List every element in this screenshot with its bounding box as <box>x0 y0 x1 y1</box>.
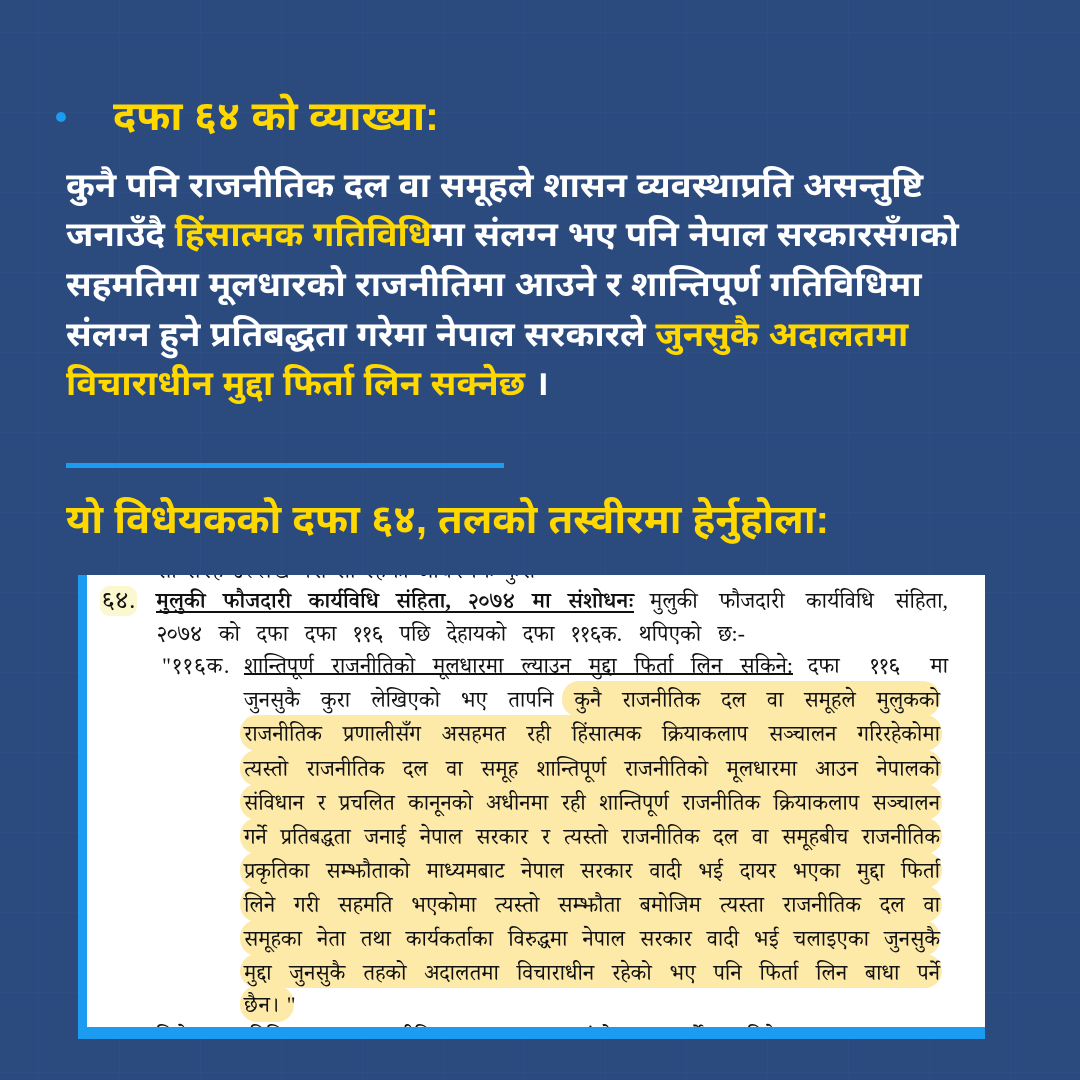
section heading <box>154 588 948 614</box>
divider line <box>66 463 504 468</box>
highlight: section number <box>100 586 137 616</box>
clause body: संविधान र प्रचलित कानूनको अधीनमा रही शान्तिपूर्ण राजनीतिक क्रियाकलाप सञ्चालन <box>244 790 940 815</box>
clause body: प्रकृतिका सम्झौताको माध्यमबाट नेपाल सरकार वादी भई दायर भएका मुद्दा फिर्ता <box>244 858 940 883</box>
clause body: त्यस्तो राजनीतिक दल वा समूह शान्तिपूर्ण राजनीतिको मूलधारमा आउन नेपालको <box>244 756 940 781</box>
second line: २०७४ को दफा दफा ११६ पछि देहायको दफा ११६क. थपिएको छ:- <box>157 621 745 646</box>
section heading: मुलुकी फौजदारी कार्यविधि संहिता, २०७४ मा संशोधनः <box>156 588 634 613</box>
text block: explanation: कुनै पनि राजनीतिक दल वा समूहले शासन व्यवस्थाप्रति असन्तुष्टि <box>66 166 923 205</box>
text block: explanation: सहमतिमा मूलधारको राजनीतिमा आउने र शान्तिपूर्ण गतिविधिमा <box>66 265 922 304</box>
document excerpt: section 64 <box>87 575 985 1027</box>
heading: explanation of section 64: दफा ६४ को व्याख्या: <box>113 93 439 139</box>
heading: see section 64 in the image below: यो विधेयकको दफा ६४, तलको तस्वीरमा हेर्नुहोला: <box>66 498 829 542</box>
text block: explanation: जनाउँदै हिंसात्मक गतिविधिमा संलग्न भए पनि नेपाल सरकारसँगको <box>66 215 959 254</box>
text block: explanation: संलग्न हुने प्रतिबद्धता गरेमा नेपाल सरकारले जुनसुकै अदालतमा <box>66 315 908 354</box>
clause body: मुद्दा जुनसुकै तहको अदालतमा विचाराधीन रहेको भए पनि फिर्ता लिन बाधा पर्ने <box>244 960 940 985</box>
text block: explanation: विचाराधीन मुद्दा फिर्ता लिन सक्नेछ । <box>66 364 549 403</box>
clause number: "११६क. <box>162 653 231 678</box>
clause body: जुनसुकै कुरा लेखिएको भए तापनि कुनै राजनीतिक दल वा समूहले मुलुकको <box>244 687 940 712</box>
clause heading: दफा ११६ मा <box>808 653 948 678</box>
section number: ६४. <box>102 588 136 614</box>
highlight: amendment passage <box>240 681 942 1022</box>
bullet dot <box>56 112 66 122</box>
clause body <box>243 686 941 1017</box>
section heading: मुलुकी फौजदारी कार्यविधि संहिता, <box>650 588 948 613</box>
clause body: समूहका नेता तथा कार्यकर्ताका विरुद्धमा नेपाल सरकार वादी भई चलाइएका जुनसुकै <box>244 926 940 951</box>
clause body: राजनीतिक प्रणालीसँग असहमत रही हिंसात्मक क्रियाकलाप सञ्चालन गरिरहेकोमा <box>244 721 940 746</box>
clause body: छैन। " <box>244 992 297 1017</box>
clause body: लिने गरी सहमति भएकोमा त्यस्तो सम्झौता बमोजिम त्यस्ता राजनीतिक दल वा <box>244 892 940 917</box>
clause heading: शान्तिपूर्ण राजनीतिको मूलधारमा ल्याउन मुद्दा फिर्ता लिन सकिने: <box>244 653 793 678</box>
image frame: blue border <box>78 575 985 1039</box>
text block: explanation <box>66 166 960 404</box>
clause body: गर्ने प्रतिबद्धता जनाई नेपाल सरकार र त्यस्तो राजनीतिक दल वा समूहबीच राजनीतिक <box>244 824 940 849</box>
